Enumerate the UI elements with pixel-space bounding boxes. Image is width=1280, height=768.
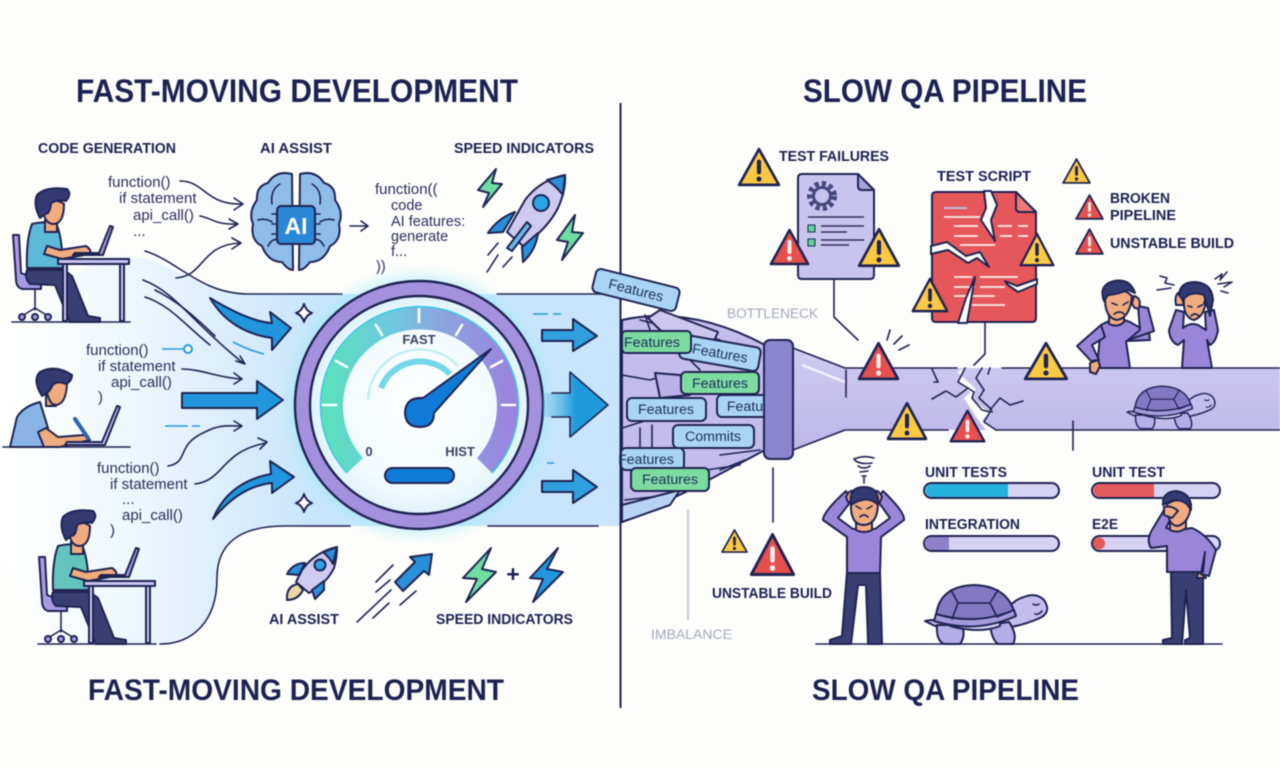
code snippet one: ... xyxy=(133,223,146,240)
tag: features clipped left xyxy=(618,448,684,470)
vertical divider xyxy=(620,103,622,708)
warning: yellow test failures xyxy=(739,149,779,185)
turtle on pipe xyxy=(1127,386,1215,429)
bar: unit tests: UNIT TESTS xyxy=(925,465,1007,481)
bar: e2e xyxy=(1092,517,1220,551)
plus sign: + xyxy=(506,561,520,587)
gauge labels: FAST xyxy=(402,332,436,347)
arrow: right middle xyxy=(543,372,608,437)
connector: doc to pipe xyxy=(834,279,858,340)
tag: features green three xyxy=(631,468,709,491)
code arrows to brain xyxy=(176,181,243,278)
gauge: 0 xyxy=(365,444,373,459)
icon: test failures document xyxy=(798,174,874,279)
code snippet three: if statement xyxy=(110,476,188,493)
label: AI assist bottom: AI ASSIST xyxy=(269,612,339,628)
icon: broken test script xyxy=(931,191,1037,323)
tag: features blue: Features xyxy=(638,402,694,418)
warning: yellow on script right xyxy=(1021,234,1053,265)
sparkle bottom xyxy=(296,494,312,512)
bar: integration: INTEGRATION xyxy=(925,517,1020,533)
generated code block: function(( xyxy=(375,181,438,198)
warning: yellow on script left xyxy=(913,279,947,311)
heading: speed indicators: SPEED INDICATORS xyxy=(454,141,594,157)
icon: speed arrow xyxy=(357,554,432,622)
dash marks right xyxy=(533,314,561,463)
gauge inner arcs xyxy=(368,349,458,400)
icon: small rocket xyxy=(287,547,337,600)
pipe crack xyxy=(932,368,1023,430)
code connector dot xyxy=(162,345,192,353)
label: imbalance: IMBALANCE xyxy=(651,627,732,642)
title: fast-moving development top: FAST-MOVING DEVELOPMENT xyxy=(76,73,518,109)
generated code block: f... xyxy=(391,244,407,260)
heading: code generation: CODE GENERATION xyxy=(38,141,176,157)
code arrows to gauge xyxy=(143,280,267,484)
ground line xyxy=(816,643,1222,645)
code snippet two: function() xyxy=(86,342,149,359)
icon: AI brain: AI xyxy=(284,213,308,239)
arrow: right bottom xyxy=(542,470,597,503)
warning: small yellow xyxy=(1063,159,1090,183)
arrow: curved bottom xyxy=(213,461,294,519)
code snippet three: api_call() xyxy=(122,507,183,524)
gauge xyxy=(279,265,559,545)
generated code block: )) xyxy=(376,259,386,275)
tag: features green three: Features xyxy=(642,472,698,488)
tag: features clipped right xyxy=(717,395,777,417)
label: broken pipeline xyxy=(1110,191,1176,224)
icon: lightning right xyxy=(557,215,583,260)
tag: features green two xyxy=(681,372,759,394)
warning: yellow lower xyxy=(722,530,747,552)
panel: blue development flow xyxy=(0,251,621,644)
connector: script to pipe xyxy=(974,322,985,365)
tag: features tilted middle: Features xyxy=(691,341,749,367)
label: bottleneck: BOTTLENECK xyxy=(727,306,818,321)
tag: commits: Commits xyxy=(685,429,741,445)
code snippet one: function() xyxy=(108,174,171,191)
code snippet two xyxy=(86,342,176,406)
tag: features tilted top xyxy=(591,268,681,312)
bar: unit test failing: UNIT TEST xyxy=(1092,465,1165,481)
label: unstable build lower: UNSTABLE BUILD xyxy=(712,586,832,602)
bottleneck clamp xyxy=(764,340,793,459)
warning: yellow on document xyxy=(859,229,899,266)
warning: yellow under pipe xyxy=(888,403,926,439)
code snippet one xyxy=(108,174,197,240)
code snippet three: ) xyxy=(110,522,115,539)
warning: red under crack xyxy=(951,411,984,441)
code snippet three xyxy=(97,460,188,539)
generated code block: generate xyxy=(391,229,448,245)
connector: pipe to bars xyxy=(1072,421,1074,450)
person stressed left xyxy=(823,457,904,644)
title: slow QA pipeline bottom: SLOW QA PIPELINE xyxy=(812,674,1079,707)
tag: features tilted top: Features xyxy=(607,276,665,306)
tag: features green one: Features xyxy=(624,335,680,351)
warning: yellow on pipe xyxy=(1025,343,1067,379)
generated code block: code xyxy=(391,198,422,214)
heading: test script: TEST SCRIPT xyxy=(937,169,1031,185)
tag: features clipped right: Featu xyxy=(727,399,763,415)
imbalance rule xyxy=(687,510,689,620)
code snippet three: ... xyxy=(122,491,135,508)
heading: test failures: TEST FAILURES xyxy=(779,149,889,165)
blue dash marks xyxy=(165,342,264,426)
sparkle top xyxy=(296,304,312,322)
arrow: straight middle xyxy=(182,381,283,419)
label: speed indicators bottom: SPEED INDICATORS xyxy=(436,612,573,628)
gauge ticks xyxy=(323,309,515,405)
tag: commits xyxy=(673,425,754,448)
generated code block xyxy=(375,181,465,275)
warning: red lower xyxy=(751,535,794,574)
tag: features tilted middle xyxy=(679,334,761,372)
heading: AI assist: AI ASSIST xyxy=(260,141,332,157)
person frustrated on pipe left xyxy=(1077,280,1154,374)
icon: AI brain xyxy=(251,173,341,270)
warning: red broken pipeline xyxy=(1076,195,1103,219)
title: slow QA pipeline top: SLOW QA PIPELINE xyxy=(803,73,1087,109)
tag: features blue xyxy=(627,398,706,421)
tag: features green one xyxy=(622,331,691,353)
crack: lower xyxy=(958,277,975,323)
developer at desk bottom xyxy=(38,510,156,644)
tag: features clipped left: Features xyxy=(618,452,674,468)
arrow from brain to code xyxy=(350,221,368,231)
code snippet two: ) xyxy=(98,389,103,406)
developer with laptop middle xyxy=(3,369,130,447)
bar: e2e: E2E xyxy=(1092,517,1118,533)
bottleneck rubble of commits xyxy=(622,310,765,522)
warning: red on pipe xyxy=(859,343,898,379)
developer at desk top xyxy=(12,188,130,322)
code snippet three: function() xyxy=(97,460,160,477)
connector: clamp to warning xyxy=(772,468,774,522)
crack: vertical top xyxy=(981,191,997,241)
icon: lightning top left xyxy=(478,169,502,207)
gauge: HIST xyxy=(445,444,475,459)
tag: features green two: Features xyxy=(692,376,748,392)
bar: unit test failing xyxy=(1092,465,1220,498)
code snippet one: api_call() xyxy=(133,207,194,224)
crack: right xyxy=(1005,279,1037,292)
icon: blue lightning xyxy=(530,548,563,602)
arrow: right top xyxy=(542,319,597,351)
arrow: curved top xyxy=(210,298,291,350)
icon: rocket xyxy=(487,175,565,272)
code snippet two: if statement xyxy=(98,358,176,375)
turtle on ground xyxy=(925,585,1047,644)
warning: red unstable build xyxy=(1076,229,1103,254)
label: unstable build: UNSTABLE BUILD xyxy=(1110,236,1234,252)
icon: green lightning xyxy=(463,548,496,602)
warning: red on document xyxy=(771,230,808,264)
label: broken pipeline: PIPELINE xyxy=(1110,208,1176,224)
crack: horizontal xyxy=(931,242,989,267)
label: broken pipeline: BROKEN xyxy=(1110,191,1170,207)
bar: unit tests xyxy=(924,465,1059,498)
person frustrated on pipe right xyxy=(1157,272,1232,368)
generated code block: AI features: xyxy=(391,214,465,230)
code snippet one: if statement xyxy=(119,190,197,207)
title: fast-moving development bottom: FAST-MOVING DEVELOPMENT xyxy=(88,674,504,707)
gauge pill xyxy=(385,468,454,483)
bar: integration xyxy=(924,517,1059,551)
warning rays xyxy=(887,330,909,350)
person facepalm right xyxy=(1149,491,1216,644)
code snippet two: api_call() xyxy=(111,374,172,391)
gauge needle xyxy=(405,349,491,427)
pipeline funnel and pipe xyxy=(793,348,1280,450)
